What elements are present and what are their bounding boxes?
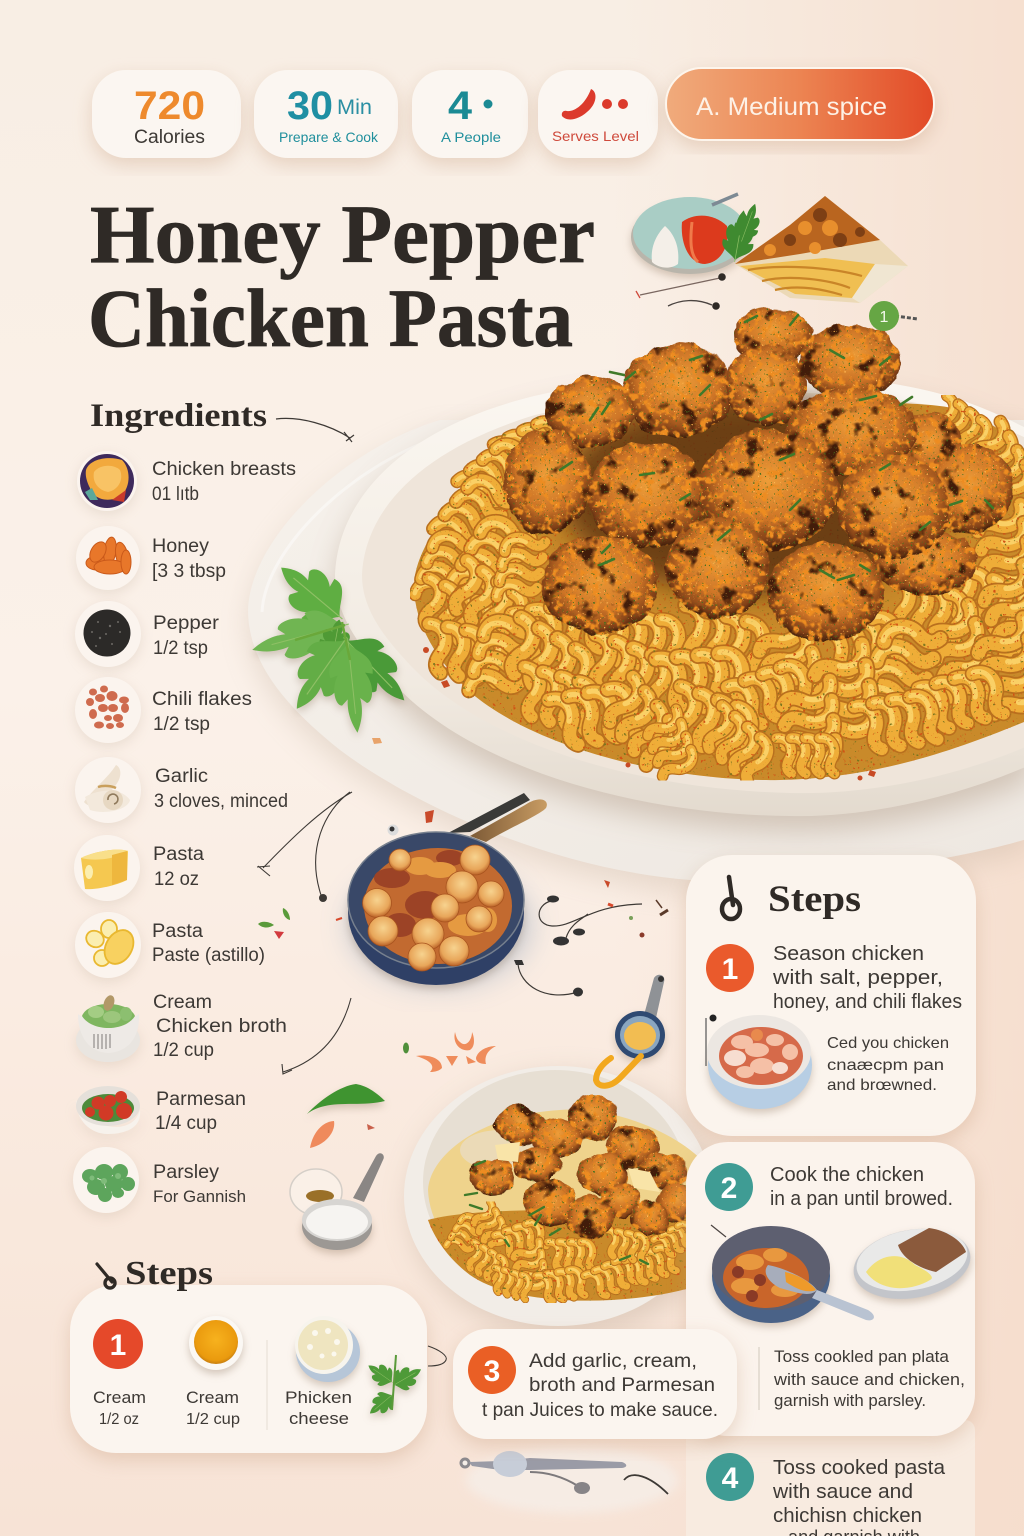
- spice pill: [666, 68, 934, 140]
- steps heading with ladle icon: Steps: [125, 1255, 213, 1292]
- ingredient: honey: Honey: [152, 536, 210, 557]
- chili flakes on plate: [372, 647, 876, 780]
- panel: step strip: 1/2 oz: [99, 1411, 139, 1428]
- ingredient: parsley: Parsley: [153, 1162, 220, 1183]
- ingredient: pasta slices: Paste (astillo): [152, 945, 265, 966]
- chili flakes scattered: [336, 810, 668, 938]
- panel: step strip: Phicken: [285, 1388, 352, 1407]
- ingredient: garlic: 3 cloves, minced: [154, 791, 288, 812]
- panel: step 4: with sauce and: [772, 1481, 913, 1503]
- ingredient: parmesan: Parmesan: [156, 1089, 246, 1110]
- arrow: to pasta row: [257, 792, 352, 876]
- panel: step 3: broth and Parmesan: [529, 1374, 715, 1396]
- title: Chicken Pasta: [88, 272, 573, 364]
- stat card: people: A People: [441, 129, 501, 145]
- orange shell pieces: [416, 1032, 496, 1072]
- ingredient: cream: Cream: [153, 992, 212, 1013]
- stat card: time: [254, 70, 398, 158]
- ingredients heading: Ingredients: [90, 398, 267, 434]
- bowl pasta: [428, 1202, 700, 1303]
- main plate with pasta and chicken: [246, 308, 1024, 893]
- panel: step 1 with heading: [686, 855, 976, 1136]
- ingredient: pasta block: 12 oz: [154, 869, 199, 890]
- second pasta bowl: [404, 1066, 720, 1335]
- badge 4: 4: [722, 1462, 739, 1495]
- ingredient: pasta slices: Pasta: [152, 921, 203, 942]
- panel: step strip: Cream: [93, 1388, 146, 1407]
- ingredient: chicken breasts: [77, 451, 296, 511]
- panel: step 2: garnish with parsley.: [774, 1391, 926, 1410]
- connector curl: [428, 1346, 446, 1366]
- stat card: spice level: [538, 70, 658, 158]
- ingredient: garlic: [75, 757, 288, 823]
- title: Honey Pepper: [90, 188, 595, 280]
- badge 1: 1: [722, 953, 738, 986]
- panel: step strip: Cream: [186, 1388, 239, 1407]
- ingredient: parmesan: [76, 1086, 246, 1134]
- connector marks near mini illustration: [636, 273, 726, 310]
- seasoned chicken bowl: [706, 1014, 812, 1109]
- stat card: calories: [92, 70, 241, 158]
- spoon and fork on small plate: [461, 1447, 678, 1513]
- spice pill: A. Medium spice: [696, 93, 887, 121]
- green number badge: 1: [880, 309, 889, 326]
- ingredient: cream: Chicken broth: [156, 1016, 287, 1037]
- ingredient: parsley: For Gannish: [153, 1187, 246, 1206]
- stat card: calories: Calories: [134, 127, 205, 148]
- stat card: time: Min: [337, 96, 372, 119]
- plate with herb crust and egg: [848, 1220, 976, 1308]
- badge 2: 2: [721, 1172, 737, 1205]
- pasta mound: [410, 395, 1024, 780]
- badge 2: [705, 1163, 753, 1211]
- ingredient: parmesan: 1/4 cup: [155, 1113, 217, 1134]
- stat card: people: [412, 70, 528, 158]
- parsley garnish on plate: [246, 548, 421, 735]
- panel: step 1 with heading: with salt, pepper,: [772, 967, 943, 989]
- panel: step strip: [70, 1285, 427, 1453]
- ingredient: pepper: [75, 601, 220, 667]
- panel: step 1 with heading: Ced you chicken: [827, 1035, 949, 1052]
- panel: step 1 with heading: cnaæcpm pan: [827, 1057, 944, 1074]
- badge 3: [468, 1346, 516, 1394]
- pan with chicken: [348, 793, 547, 987]
- stat card: time: 30: [287, 84, 333, 128]
- ingredient: honey: [3 3 tbsp: [152, 561, 226, 582]
- arrow: to pan: [316, 792, 350, 902]
- green number badge: [869, 301, 918, 331]
- arrow: to cream: [282, 998, 351, 1074]
- panel: step 2: Toss cookled pan plata: [774, 1347, 950, 1366]
- parsley sprig: [362, 1355, 427, 1422]
- stat card: people: 4: [448, 84, 473, 128]
- panel: step 4: Toss cooked pasta: [773, 1457, 946, 1479]
- badge 1: 1: [110, 1329, 126, 1362]
- mini illustration: bowl of vegetables and pasta slice: [631, 194, 908, 303]
- ingredient: pasta block: Pasta: [153, 844, 204, 865]
- panel: step 2: Cook the chicken: [770, 1164, 924, 1186]
- ingredient: cream: [76, 992, 287, 1062]
- panel: step 1 with heading: Season chicken: [773, 943, 924, 965]
- panel: step 4: chichisn chicken: [773, 1505, 922, 1527]
- badge 1: [93, 1319, 143, 1369]
- panel: step 3: t pan Juices to make sauce.: [482, 1399, 718, 1421]
- steps heading with ladle icon: [97, 1255, 213, 1292]
- ingredient: pasta block: [74, 835, 204, 901]
- stat card: calories: 720: [134, 84, 205, 128]
- ingredient: pasta slices: [75, 912, 265, 978]
- ingredient: parsley: [73, 1147, 246, 1213]
- stat card: spice level: Serves Level: [552, 129, 639, 144]
- ingredient: garlic: Garlic: [155, 766, 208, 787]
- ingredient: chicken breasts: Chicken breasts: [152, 459, 296, 480]
- panel: step 1 with heading: honey, and chili flakes: [773, 991, 962, 1013]
- scattered garnish near pasta row: [258, 908, 290, 939]
- chicken pieces: [503, 308, 1012, 642]
- badge 3: 3: [484, 1355, 500, 1388]
- panel: step strip: cheese: [289, 1409, 349, 1428]
- ingredient: pepper: Pepper: [153, 613, 220, 634]
- ingredient: chili flakes: [75, 677, 252, 743]
- cream cup: [189, 1316, 243, 1370]
- leaf and petal: [307, 1084, 385, 1148]
- panel: step strip: 1/2 cup: [186, 1411, 240, 1428]
- panel: step 2: in a pan until browed.: [770, 1188, 953, 1210]
- badge 1: [706, 944, 754, 992]
- ladle icon: [722, 877, 740, 919]
- panel: step 1 with heading: and brœwned.: [827, 1077, 937, 1094]
- ingredient: chili flakes: Chili flakes: [152, 689, 252, 710]
- ingredient: honey: [76, 526, 226, 590]
- stat card: time: Prepare & Cook: [279, 129, 379, 145]
- ingredient: cream: 1/2 cup: [153, 1040, 214, 1061]
- title: [88, 188, 595, 364]
- frying pan with spatula: [711, 1225, 874, 1323]
- ladle with yellow sauce: [596, 975, 665, 1086]
- decorative curls with dots near pan: [514, 896, 642, 996]
- panel: step 2: with sauce and chicken,: [773, 1370, 965, 1389]
- panel: step 3: Add garlic, cream,: [529, 1350, 697, 1372]
- ingredient: chili flakes: 1/2 tsp: [153, 714, 210, 735]
- panel: step 2: [686, 1142, 976, 1436]
- cheese bowl: [295, 1316, 360, 1382]
- glass dish and measuring cup: [290, 1153, 384, 1250]
- badge 4: [706, 1453, 754, 1501]
- ingredient: pepper: 1/2 tsp: [153, 638, 208, 659]
- small green leaf: [403, 1042, 409, 1054]
- panel: step 3: [453, 1329, 737, 1439]
- herb garnish on chicken: [560, 315, 993, 580]
- ingredient: chicken breasts: 01 lıtb: [152, 484, 199, 505]
- panel: step 1 with heading: Steps: [768, 879, 861, 920]
- panel: step 4: [686, 1420, 975, 1536]
- ingredients heading: [90, 398, 354, 442]
- bowl chicken: [470, 1094, 697, 1240]
